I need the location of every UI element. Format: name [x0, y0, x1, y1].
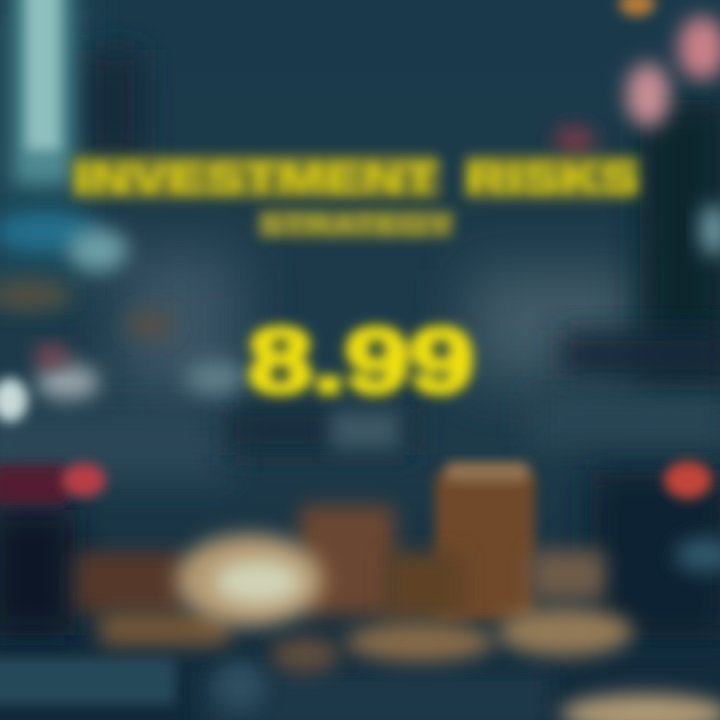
big number: 8.99 — [248, 310, 474, 412]
left street lights — [0, 345, 245, 422]
blue canopy, left — [0, 212, 174, 341]
title: RISKS — [466, 155, 638, 201]
title: INVESTMENT — [74, 155, 438, 201]
red car tail lights, left — [0, 463, 106, 505]
subtitle: STRATEGY — [260, 209, 452, 240]
coin stacks — [75, 462, 720, 720]
red car tail light, right — [664, 461, 720, 572]
pink lights, top right — [555, 0, 720, 256]
pillar of light, top left — [14, 0, 72, 185]
title — [72, 155, 640, 201]
